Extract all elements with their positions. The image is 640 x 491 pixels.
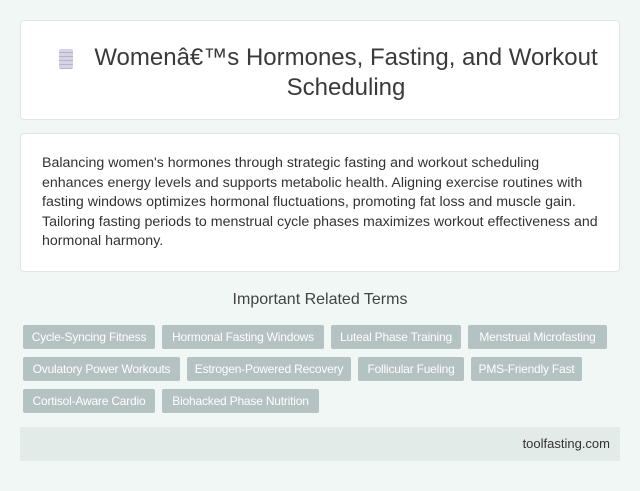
heading: related terms: Important Related Terms: [233, 291, 407, 308]
tags: Cycle-Syncing Fitness: [32, 330, 146, 344]
panel: title: [20, 20, 620, 120]
tags: Luteal Phase Training: [340, 330, 452, 344]
tags: Hormonal Fasting Windows: [172, 330, 314, 344]
tags: Menstrual Microfasting: [479, 330, 596, 344]
icon: document: [59, 49, 73, 69]
tags: Biohacked Phase Nutrition: [172, 394, 309, 408]
text block: Balancing women's hormones through strategic fasting and workout scheduling enhances energy levels and supports metabolic health. Aligning exercise routines with fasting windows optimizes hormonal fluctuations, promoting fat loss and muscle gain. Tailoring fasting periods to menstrual cycle phases maximizes workout effectiveness and hormonal harmony.: [42, 155, 598, 249]
tags: Cortisol-Aware Cardio: [33, 394, 145, 408]
footer text: toolfasting.com: [523, 436, 610, 451]
tags: PMS-Friendly Fast: [479, 362, 574, 376]
title: Womenâ€™s Hormones, Fasting, and Workout Scheduling: [94, 44, 598, 101]
tags: Estrogen-Powered Recovery: [195, 362, 343, 376]
footer: [20, 427, 620, 461]
panel: description: [20, 133, 620, 272]
tags: Follicular Fueling: [367, 362, 455, 376]
tags: Ovulatory Power Workouts: [33, 362, 170, 376]
